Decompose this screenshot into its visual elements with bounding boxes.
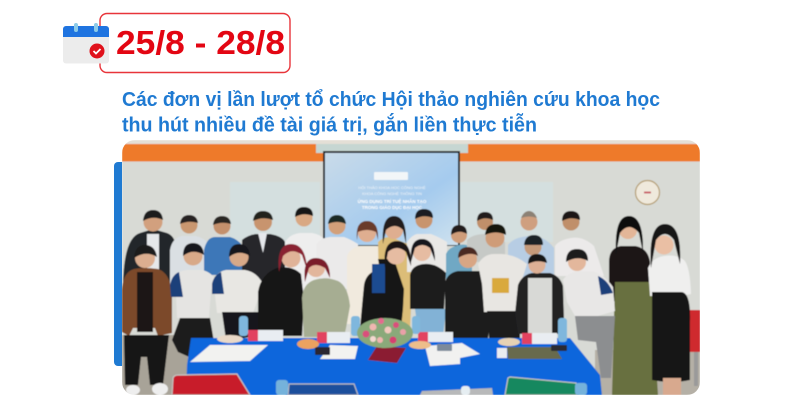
student with red hair in black — [258, 267, 304, 336]
student in black vest and jeans — [410, 264, 446, 309]
polo student 1 — [170, 270, 217, 318]
chairs — [172, 374, 587, 395]
photo: group at seminar — [122, 140, 700, 395]
projector screen: HỘI THẢO KHOA HỌC CÔNG NGHỆ — [358, 185, 426, 190]
date badge — [100, 14, 290, 72]
title: thu hút nhiều đề tài giá trị, gắn liền thực tiễn — [122, 112, 537, 136]
projector screen — [316, 144, 468, 246]
floor — [122, 335, 700, 395]
wall clock — [636, 180, 660, 204]
student in black jacket — [445, 271, 493, 339]
papers, book and laptop on table — [190, 343, 567, 366]
flower bouquet — [357, 318, 413, 348]
room wall — [122, 160, 700, 370]
name cards — [248, 330, 557, 344]
title: Các đơn vị lần lượt tổ chức Hội thảo nghiên cứu khoa học — [122, 89, 660, 111]
whiteboards — [230, 182, 553, 242]
woman in black top and olive trousers — [609, 216, 658, 395]
blue table — [186, 338, 602, 395]
student in sage sweater — [302, 278, 350, 337]
polo student 2 — [212, 270, 263, 313]
student in grey cardigan — [515, 273, 564, 334]
projector screen: ỨNG DỤNG TRÍ TUỆ NHÂN TẠO — [358, 197, 427, 204]
plates and water bottles — [217, 316, 567, 349]
date badge: 25/8 - 28/8 — [116, 24, 285, 61]
title — [122, 89, 660, 136]
brown jacket student — [122, 268, 172, 336]
blue accent bar — [114, 162, 122, 366]
ceiling and orange band — [122, 140, 700, 162]
student in polo and black skirt — [360, 259, 404, 329]
icon: calendar — [63, 23, 109, 64]
red chair at right — [688, 310, 700, 386]
projector screen: TRONG GIÁO DỤC ĐẠI HỌC — [362, 204, 423, 210]
projector screen: KHOA CÔNG NGHỆ THÔNG TIN — [362, 191, 422, 196]
polo student at right — [563, 276, 616, 316]
student in white tee — [478, 254, 527, 312]
front row people — [122, 224, 615, 395]
back row people — [123, 207, 604, 330]
woman in white shirt and black skirt — [648, 224, 691, 395]
